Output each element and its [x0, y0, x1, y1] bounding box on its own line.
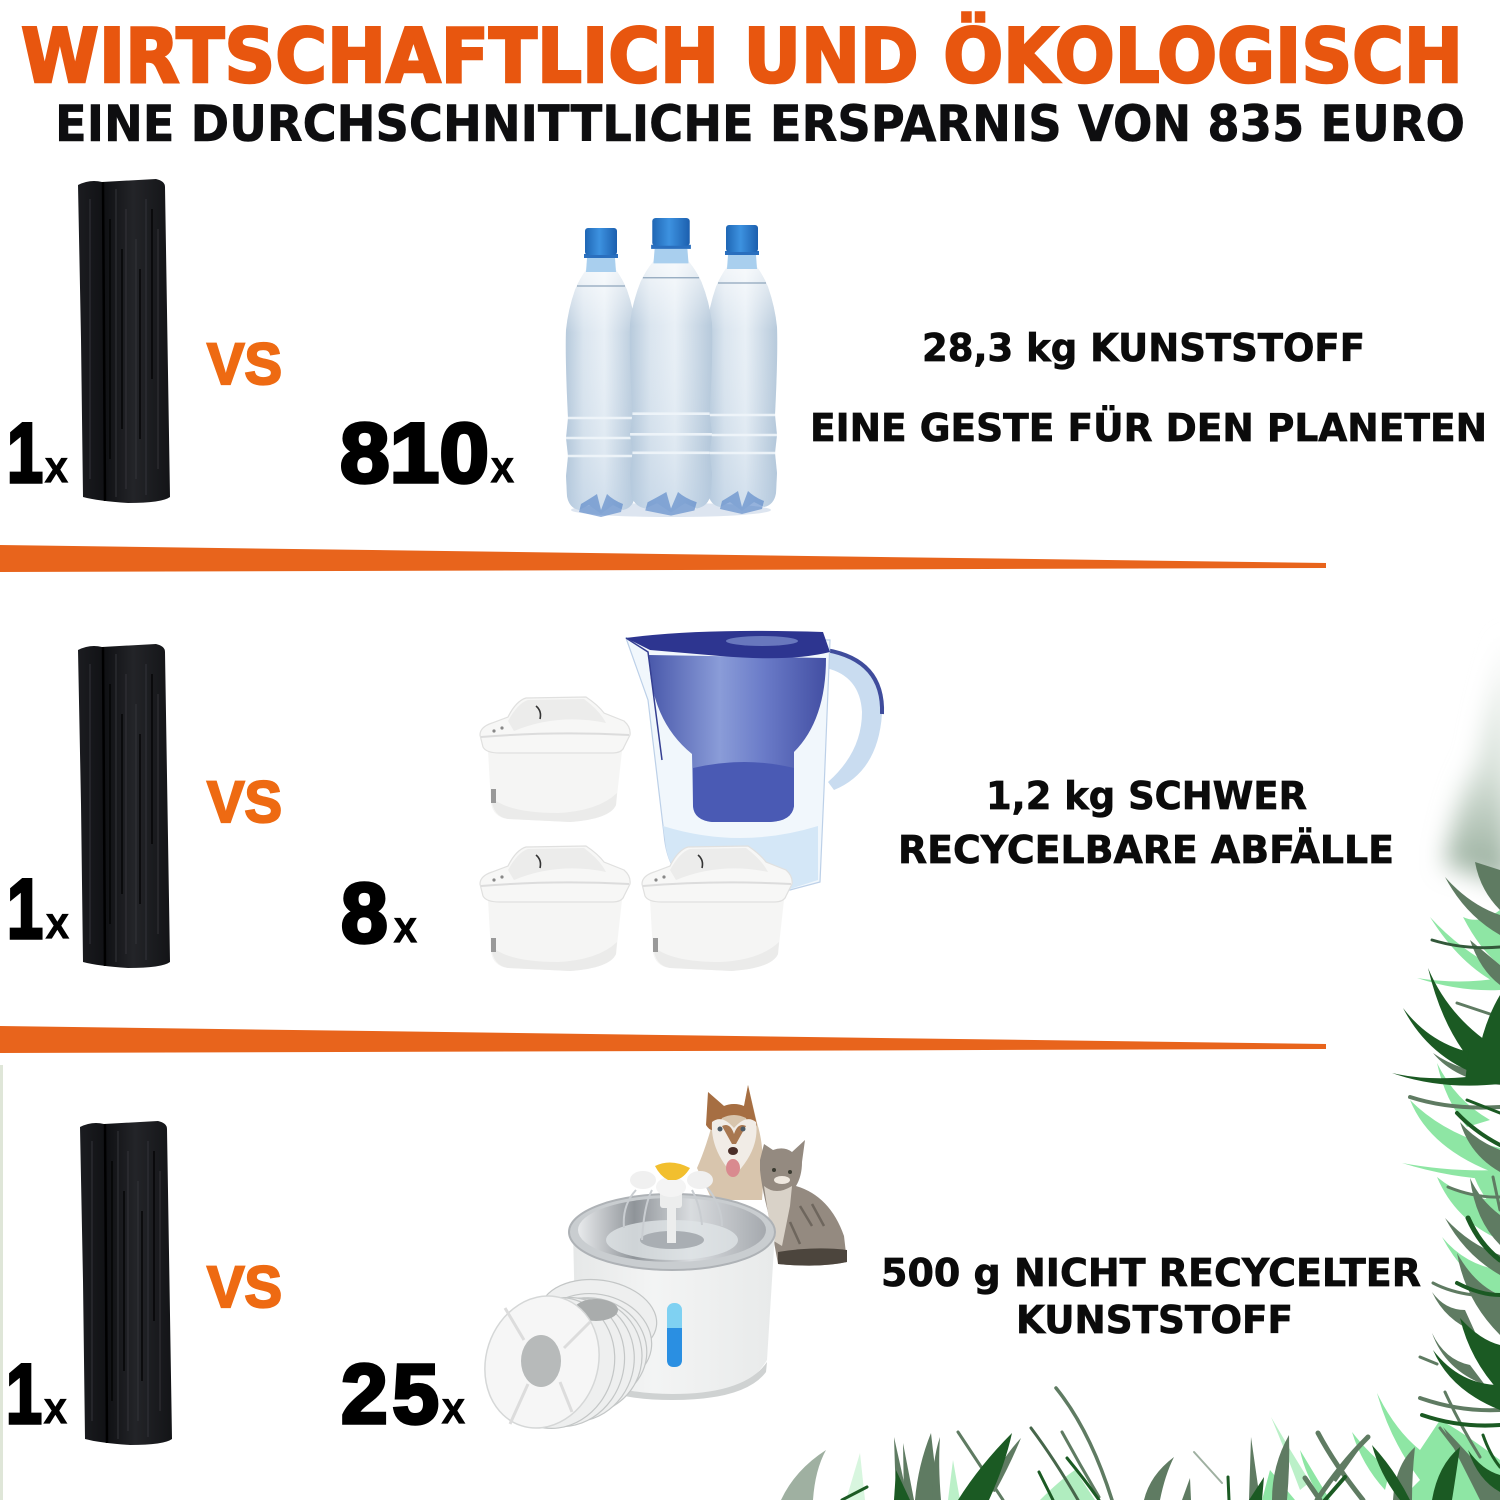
- icon: water bottles: [566, 218, 777, 517]
- vs label: VS: [207, 1255, 282, 1320]
- count 810x: 810: [340, 406, 489, 500]
- vs label: VS: [207, 770, 282, 835]
- count 1x: 1: [7, 862, 43, 956]
- icon: cat: [760, 1140, 847, 1266]
- planet gesture text: EINE GESTE FÜR DEN PLANETEN: [810, 406, 1487, 450]
- count 1x: 1: [6, 1347, 42, 1441]
- plastic type text: KUNSTSTOFF: [1016, 1298, 1293, 1342]
- count 1x: X: [46, 908, 69, 946]
- icon: filter cartridge: [642, 846, 792, 971]
- waste type text: RECYCELBARE ABFÄLLE: [898, 828, 1394, 872]
- count 1x: 1: [7, 406, 43, 500]
- count 8x: 8: [341, 866, 388, 960]
- waste weight text: 1,2 kg SCHWER: [986, 774, 1307, 818]
- count 8x: X: [394, 912, 417, 950]
- panel: pet fountain comparison: [6, 1085, 1421, 1445]
- divider: [0, 545, 1326, 572]
- count 1x: X: [45, 452, 68, 490]
- grass decoration: [781, 635, 1500, 1500]
- plastic weight text: 28,3 kg KUNSTSTOFF: [922, 326, 1365, 370]
- count 810x: X: [491, 452, 514, 490]
- icon: replacement filters: [468, 1272, 662, 1443]
- icon: charcoal stick: [78, 179, 170, 503]
- divider: [0, 1026, 1326, 1053]
- panel: bottles comparison: [7, 179, 1487, 517]
- icon: dog: [697, 1085, 763, 1200]
- icon: filter cartridge: [480, 697, 630, 822]
- count 8x: [341, 866, 417, 960]
- icon: water pitcher: [626, 631, 882, 890]
- count 25x: 25: [341, 1347, 439, 1441]
- panel: filter cartridges comparison: [7, 631, 1394, 971]
- icon: charcoal stick: [78, 644, 170, 968]
- plastic amount text: 500 g NICHT RECYCELTER: [881, 1251, 1421, 1295]
- count 25x: X: [442, 1393, 465, 1431]
- vs label: VS: [207, 332, 282, 397]
- icon: charcoal stick: [80, 1121, 172, 1445]
- icon: pet water fountain: [569, 1162, 775, 1400]
- count 1x: X: [44, 1393, 67, 1431]
- icon: filter cartridge: [480, 846, 630, 971]
